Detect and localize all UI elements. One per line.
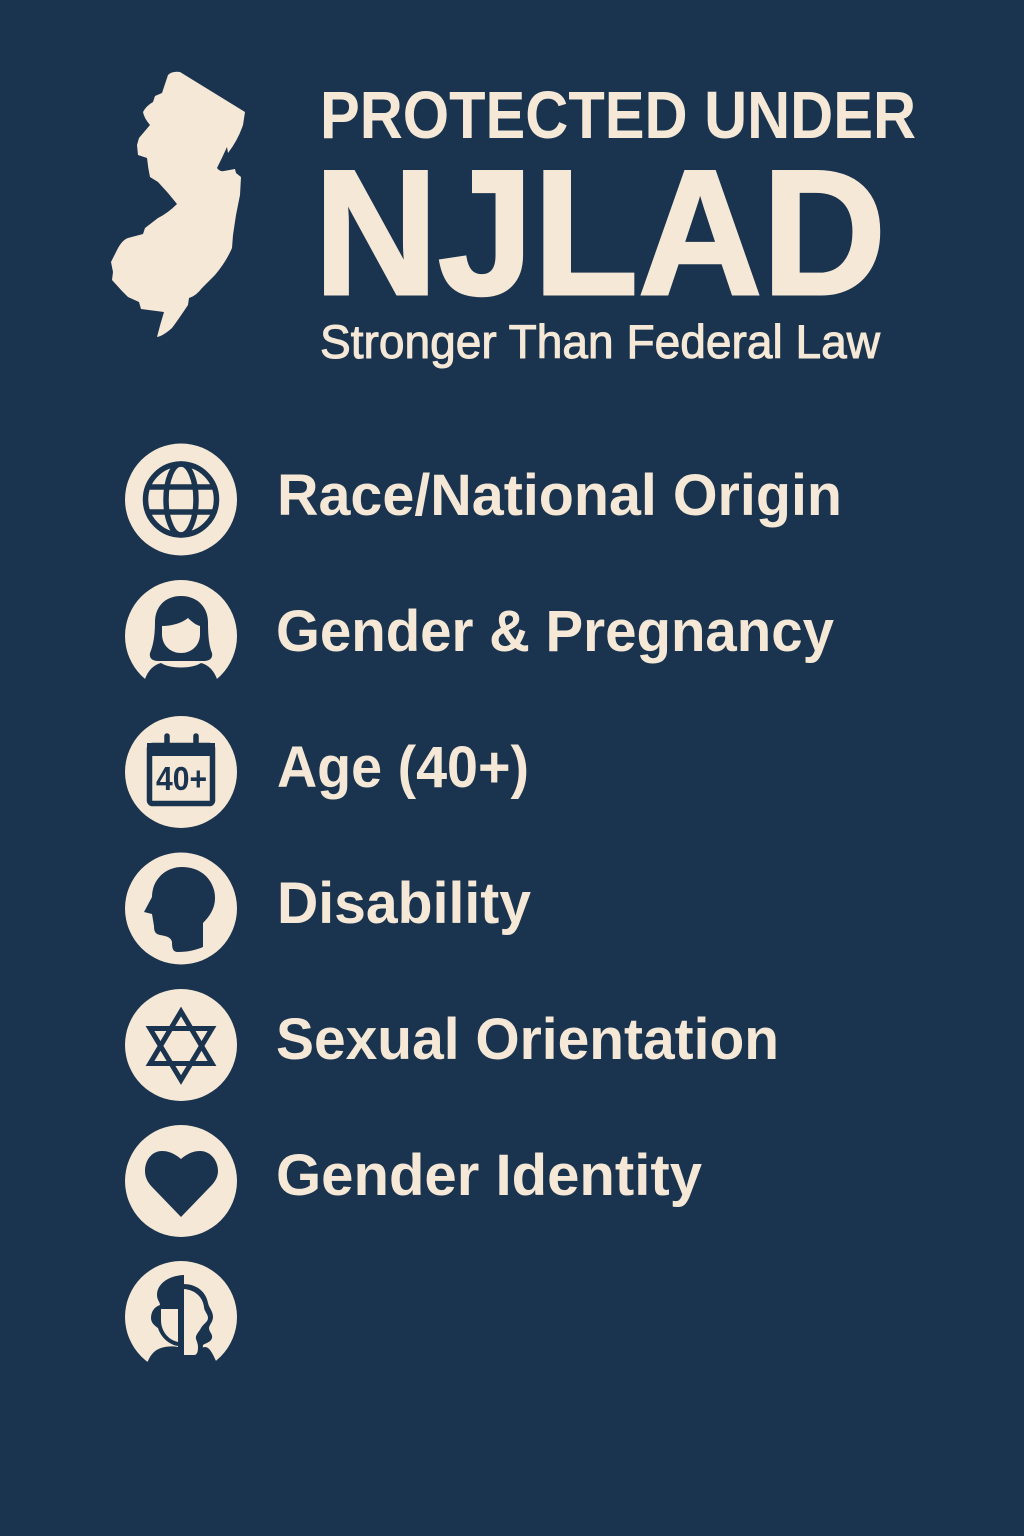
icon: woman xyxy=(125,580,237,696)
label: Gender & Pregnancy xyxy=(276,599,834,664)
label: Sexual Orientation xyxy=(276,1007,779,1072)
icon: half-and-half gender identity profile xyxy=(125,1261,237,1376)
label: Age (40+) xyxy=(277,735,529,800)
label: Race/National Origin xyxy=(277,463,842,528)
label: Gender Identity xyxy=(276,1143,702,1208)
title line: Protected Under: PROTECTED UNDER xyxy=(320,78,916,153)
icon: calendar 40+ xyxy=(125,716,237,828)
list item: sexual orientation xyxy=(125,989,779,1101)
list item: disability xyxy=(125,852,531,964)
list item: race / national origin xyxy=(125,444,842,556)
label: Disability xyxy=(277,871,531,936)
title: NJLAD: NJLAD xyxy=(314,133,886,332)
icon: calendar 40+: 40+ xyxy=(156,760,207,797)
icon: New Jersey state silhouette xyxy=(111,72,245,337)
list item: gender identity xyxy=(125,1125,702,1237)
heading block xyxy=(314,78,916,368)
list item: age 40 plus xyxy=(125,716,529,828)
icon: six-pointed star xyxy=(125,989,237,1101)
icon: heart xyxy=(125,1125,237,1237)
icon: globe xyxy=(125,444,237,556)
subtitle: Stronger Than Federal Law xyxy=(320,315,881,368)
icon: head profile xyxy=(125,852,237,964)
list item: gender and pregnancy xyxy=(125,580,834,696)
